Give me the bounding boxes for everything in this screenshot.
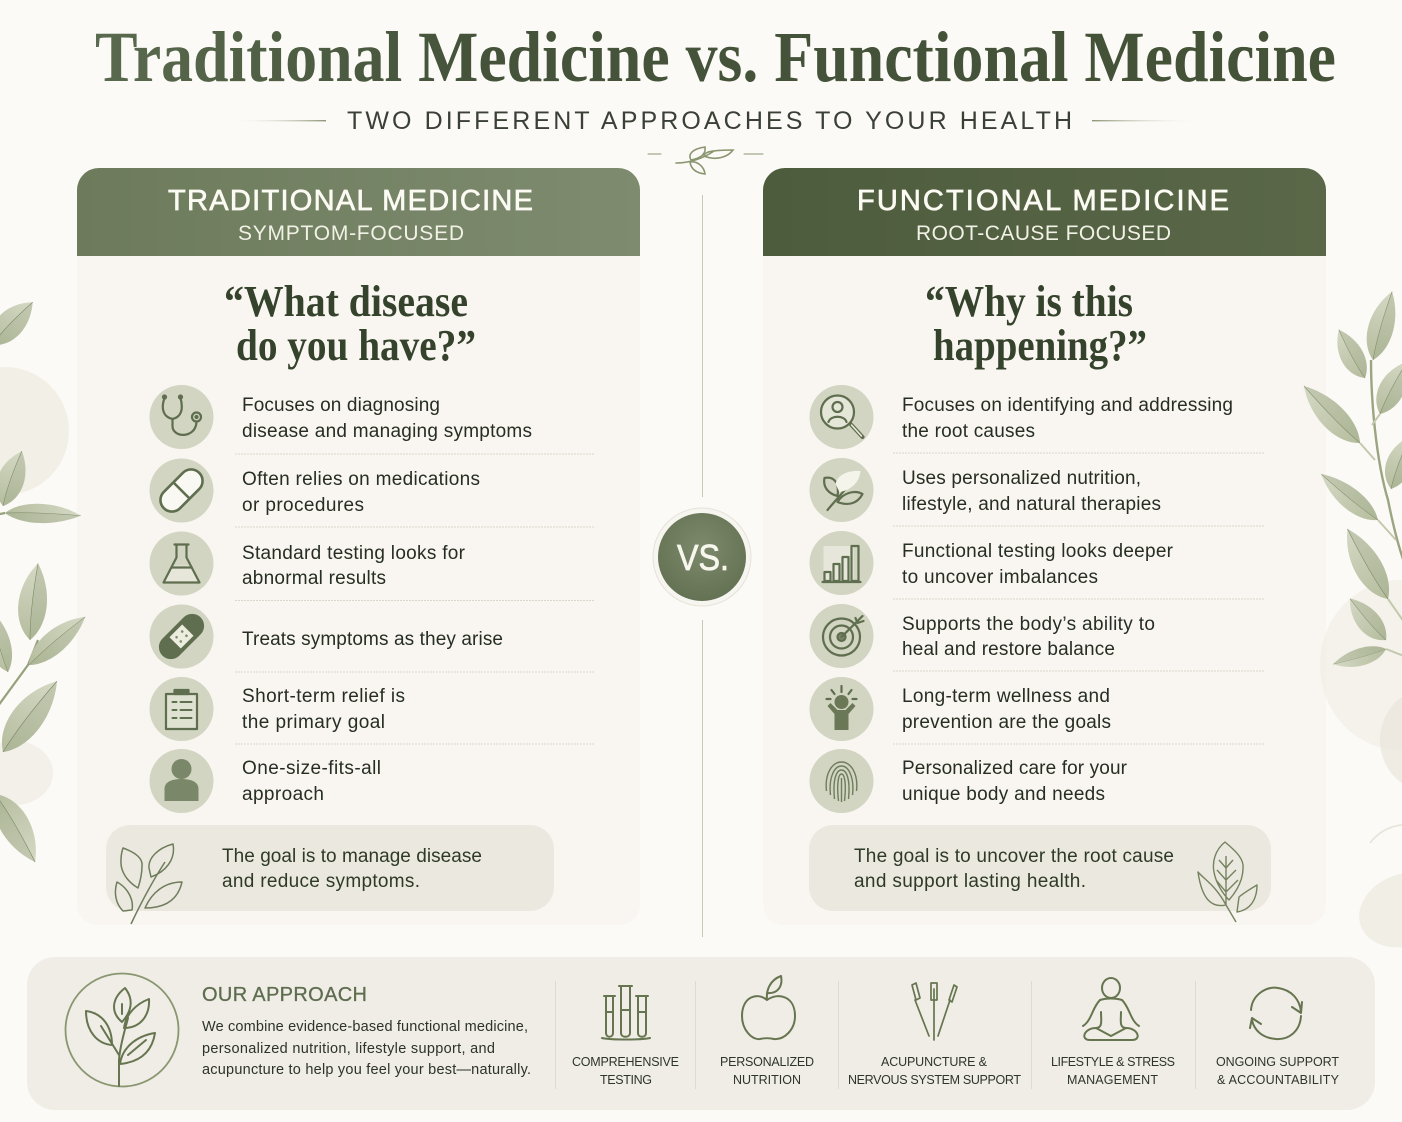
feature: ongoing support bbox=[1216, 988, 1340, 1087]
item: diagnosing: disease and managing symptoms bbox=[242, 421, 532, 442]
approach text bbox=[202, 984, 531, 1078]
goal callout: traditional: The goal is to manage disease bbox=[222, 846, 482, 867]
item: medications bbox=[150, 458, 480, 522]
item: functional testing: to uncover imbalances bbox=[902, 567, 1098, 588]
item: one size fits all bbox=[150, 749, 381, 813]
right botanical decoration bbox=[1294, 288, 1402, 960]
panel: our approach bbox=[27, 957, 1375, 1110]
vs badge bbox=[653, 508, 751, 606]
feature: comprehensive testing bbox=[572, 986, 679, 1087]
item: functional testing: Functional testing looks deeper bbox=[902, 541, 1174, 562]
panel header: functional medicine bbox=[763, 168, 1326, 256]
item: healing balance: heal and restore balance bbox=[902, 639, 1115, 660]
feature: acupuncture: NERVOUS SYSTEM SUPPORT bbox=[848, 1073, 1021, 1087]
feature: lifestyle and stress: MANAGEMENT bbox=[1067, 1073, 1158, 1087]
panel header: traditional medicine: TRADITIONAL MEDICINE bbox=[168, 185, 533, 217]
question: functional: happening?” bbox=[933, 321, 1147, 370]
goal callout: functional: The goal is to uncover the root cause bbox=[854, 846, 1174, 867]
question: functional: “Why is this bbox=[925, 277, 1133, 326]
item: functional testing bbox=[810, 531, 1174, 595]
item: medications: or procedures bbox=[242, 495, 364, 516]
panel: functional medicine bbox=[763, 168, 1326, 925]
item: short-term relief: Short-term relief is bbox=[242, 686, 405, 707]
icon: veined leaf bbox=[1198, 842, 1257, 922]
feature: lifestyle and stress bbox=[1051, 978, 1175, 1087]
item: personalized care bbox=[810, 749, 1128, 813]
goal callout: traditional bbox=[106, 825, 554, 924]
item: short-term relief bbox=[150, 677, 405, 741]
goal callout: functional bbox=[809, 825, 1271, 922]
goal callout: traditional: and reduce symptoms. bbox=[222, 871, 420, 892]
item: long-term wellness: Long-term wellness and bbox=[902, 686, 1110, 707]
approach text: personalized nutrition, lifestyle support, and bbox=[202, 1041, 495, 1057]
feature: acupuncture: ACUPUNCTURE & bbox=[881, 1055, 988, 1069]
feature: comprehensive testing: COMPREHENSIVE bbox=[572, 1055, 679, 1069]
panel header: functional medicine: ROOT-CAUSE FOCUSED bbox=[916, 222, 1171, 245]
feature: comprehensive testing: TESTING bbox=[600, 1073, 652, 1087]
item: long-term wellness: prevention are the goals bbox=[902, 712, 1111, 733]
approach text: acupuncture to help you feel your best—naturally. bbox=[202, 1062, 531, 1078]
item: personalized care: unique body and needs bbox=[902, 784, 1105, 805]
feature: personalized nutrition: PERSONALIZED bbox=[720, 1055, 814, 1069]
question: traditional bbox=[224, 277, 476, 370]
feature: personalized nutrition bbox=[720, 976, 814, 1087]
question: functional bbox=[925, 277, 1147, 370]
item: symptoms bbox=[150, 604, 503, 668]
feature: ongoing support: ONGOING SUPPORT bbox=[1216, 1055, 1339, 1069]
item: one size fits all: approach bbox=[242, 784, 324, 805]
item: healing balance bbox=[810, 604, 1155, 668]
item: root causes: Focuses on identifying and addressing bbox=[902, 395, 1233, 416]
left botanical decoration bbox=[0, 292, 92, 869]
question: traditional: “What disease bbox=[224, 277, 468, 326]
panel header: functional medicine: FUNCTIONAL MEDICINE bbox=[857, 185, 1229, 217]
item: nutrition: lifestyle, and natural therapies bbox=[902, 494, 1161, 515]
item: testing: abnormal results bbox=[242, 568, 386, 589]
panel: traditional medicine bbox=[77, 168, 640, 925]
item: symptoms: Treats symptoms as they arise bbox=[242, 629, 503, 650]
item: medications: Often relies on medications bbox=[242, 469, 480, 490]
goal callout: functional: and support lasting health. bbox=[854, 871, 1086, 892]
icon: leaf sprig bbox=[115, 844, 182, 924]
item: testing: Standard testing looks for bbox=[242, 543, 466, 564]
feature: personalized nutrition: NUTRITION bbox=[733, 1073, 801, 1087]
item: nutrition: Uses personalized nutrition, bbox=[902, 468, 1141, 489]
feature: acupuncture bbox=[848, 983, 1021, 1087]
item: one size fits all: One-size-fits-all bbox=[242, 758, 381, 779]
question: traditional: do you have?” bbox=[236, 321, 476, 370]
item: long-term wellness bbox=[810, 677, 1111, 741]
item: nutrition bbox=[810, 458, 1161, 522]
feature: ongoing support: & ACCOUNTABILITY bbox=[1217, 1073, 1340, 1087]
icon: header sprig bbox=[648, 147, 763, 174]
center divider line bbox=[702, 195, 704, 937]
item: root causes: the root causes bbox=[902, 421, 1035, 442]
vs badge: VS. bbox=[677, 537, 729, 578]
item: personalized care: Personalized care for your bbox=[902, 758, 1128, 779]
item: diagnosing bbox=[150, 385, 532, 449]
approach text: We combine evidence-based functional medicine, bbox=[202, 1019, 528, 1035]
panel header: traditional medicine bbox=[77, 168, 640, 256]
icon: plant in circle bbox=[66, 974, 178, 1086]
item: testing bbox=[150, 532, 466, 596]
item: short-term relief: the primary goal bbox=[242, 712, 385, 733]
feature: lifestyle and stress: LIFESTYLE & STRESS bbox=[1051, 1055, 1175, 1069]
panel header: traditional medicine: SYMPTOM-FOCUSED bbox=[238, 222, 464, 245]
item: diagnosing: Focuses on diagnosing bbox=[242, 395, 440, 416]
subtitle: TWO DIFFERENT APPROACHES TO YOUR HEALTH bbox=[347, 107, 1072, 135]
item: healing balance: Supports the body’s ability to bbox=[902, 614, 1155, 635]
approach text: OUR APPROACH bbox=[202, 984, 367, 1006]
item: root causes bbox=[810, 385, 1233, 449]
